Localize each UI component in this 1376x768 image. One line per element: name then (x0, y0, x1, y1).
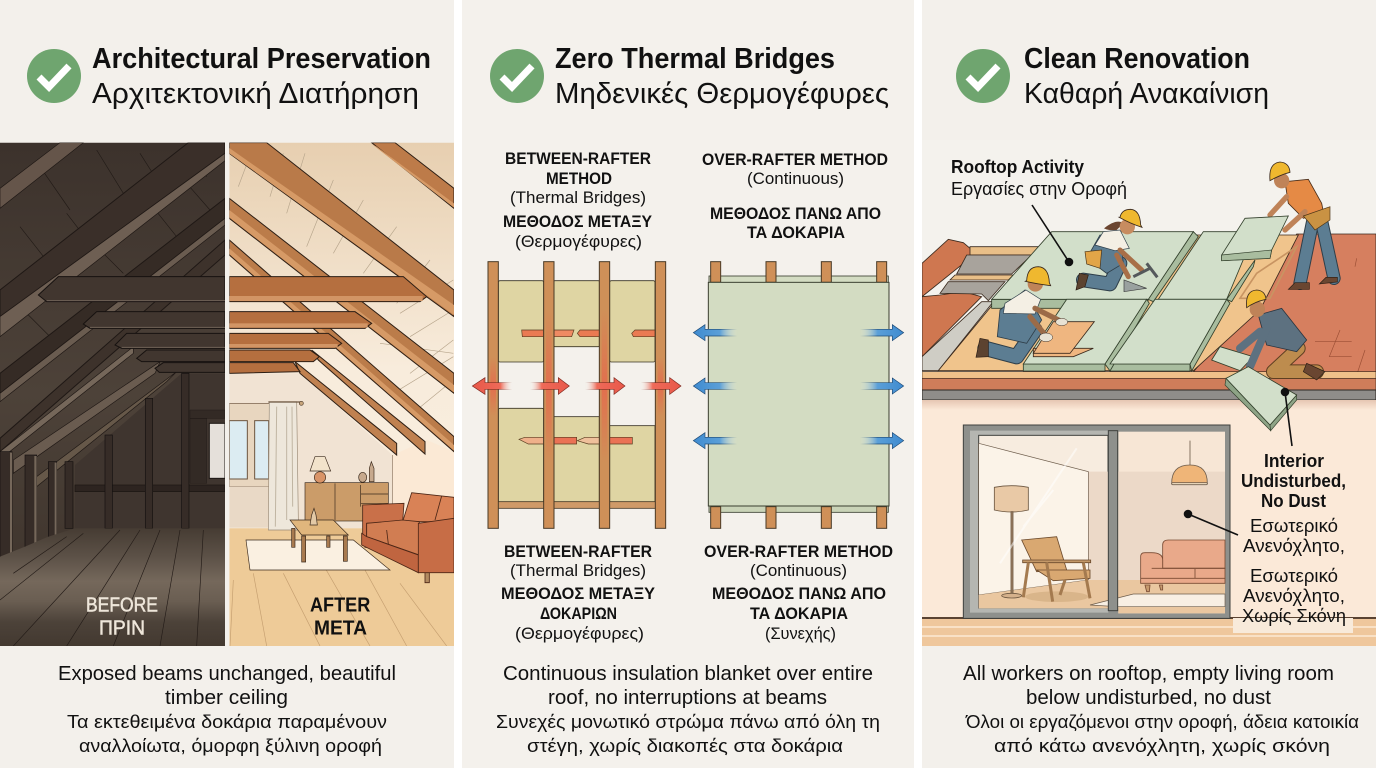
rug and coffee table (246, 508, 390, 570)
label: after: AFTER (310, 594, 371, 616)
sofa in living room (1141, 540, 1225, 592)
caption: clean renovation (963, 663, 1359, 756)
label: interior undisturbed: No Dust (1261, 491, 1326, 511)
top label: over-rafter method (702, 150, 888, 242)
label: rooftop activity (951, 157, 1127, 199)
label: interior undisturbed: Εσωτερικό (1250, 516, 1338, 536)
panel: zero thermal bridges (462, 0, 914, 768)
caption: thermal bridges (496, 663, 880, 756)
leader line: interior room (1184, 510, 1238, 535)
top label: over-rafter method: ΤΑ ΔΟΚΑΡΙΑ (747, 223, 845, 242)
top label: between-rafter method: (Θερμογέφυρες) (515, 232, 642, 251)
heading: zero thermal bridges: Zero Thermal Bridges (555, 43, 835, 75)
caption: preservation: timber ceiling (165, 687, 288, 709)
top label: between-rafter method: BETWEEN-RAFTER (505, 149, 651, 168)
bottom label: between-rafter method: (Θερμογέφυρες) (515, 624, 644, 643)
top label: between-rafter method: METHOD (546, 169, 612, 188)
heading: architectural preservation: Αρχιτεκτονική Διατήρηση (92, 78, 419, 110)
wood deck (938, 235, 1298, 371)
caption: preservation: αναλλοίωτα, όμορφη ξύλινη οροφή (79, 736, 382, 756)
illustration: rooftop with workers (922, 140, 1376, 410)
eaves (922, 372, 1376, 410)
heading: clean renovation: Clean Renovation (1024, 43, 1250, 75)
top label: between-rafter method: ΜΕΘΟΔΟΣ ΜΕΤΑΞΥ (503, 212, 653, 231)
heading: zero thermal bridges (555, 43, 889, 110)
label: interior undisturbed: Χωρίς Σκόνη (1242, 606, 1346, 626)
bottom label: over-rafter method: (Συνεχής) (765, 624, 836, 643)
top label: between-rafter method (503, 149, 653, 251)
worker: crouching right (1212, 290, 1325, 380)
caption: thermal bridges: στέγη, χωρίς διακοπές στα δοκάρια (527, 736, 843, 756)
diagram: between-rafter insulation (472, 262, 681, 528)
bottom label: between-rafter method: ΔΟΚΑΡΙΩΝ (540, 604, 617, 623)
label: interior undisturbed: Ανενόχλητο, (1243, 586, 1345, 606)
heading: clean renovation: Καθαρή Ανακαίνιση (1024, 78, 1269, 110)
roof shingles (922, 234, 1376, 380)
caption: preservation (58, 663, 396, 756)
worker: hammering centre (1076, 209, 1157, 292)
illustration: attic before (0, 143, 225, 646)
bottom label: between-rafter method: BETWEEN-RAFTER (504, 542, 652, 561)
heading: architectural preservation: Architectural Preservation (92, 43, 431, 75)
label: interior undisturbed: Εσωτερικό (1250, 566, 1338, 586)
bottom label: between-rafter method: ΜΕΘΟΔΟΣ ΜΕΤΑΞΥ (501, 584, 656, 603)
bottom label: over-rafter method: ΜΕΘΟΔΟΣ ΠΑΝΩ ΑΠΟ (712, 584, 886, 603)
illustration: sliding window with interior (963, 425, 1230, 618)
heading: architectural preservation (92, 43, 431, 110)
bottom label: over-rafter method: (Continuous) (750, 561, 847, 580)
heading: clean renovation (1024, 43, 1269, 110)
curtain (268, 401, 303, 530)
top label: over-rafter method: OVER-RAFTER METHOD (702, 150, 888, 169)
label: before (87, 597, 158, 635)
top label: over-rafter method: ΜΕΘΟΔΟΣ ΠΑΝΩ ΑΠΟ (710, 204, 881, 223)
diagram: over-rafter insulation (693, 262, 904, 528)
label: interior undisturbed: Interior (1264, 451, 1324, 471)
label: interior undisturbed: Undisturbed, (1241, 471, 1346, 491)
heat streaks through batts (519, 330, 655, 444)
heading: zero thermal bridges: Μηδενικές Θερμογέφυρες (555, 78, 889, 110)
top label: over-rafter method: (Continuous) (747, 169, 844, 188)
bottom label: over-rafter method: OVER-RAFTER METHOD (704, 542, 893, 561)
caption: thermal bridges: roof, no interruptions at beams (548, 687, 827, 709)
caption: clean renovation: Όλοι οι εργαζόμενοι στην οροφή, άδεια κατοικία (965, 712, 1359, 732)
floor deck (922, 618, 1376, 646)
heat tint on rafters (490, 310, 663, 463)
continuous blanket (708, 282, 889, 506)
caption: preservation: Τα εκτεθειμένα δοκάρια παραμένουν (67, 712, 387, 732)
bottom label: over-rafter method: ΤΑ ΔΟΚΑΡΙΑ (750, 604, 848, 623)
label: interior undisturbed (1233, 451, 1353, 633)
falling insulation panel (1225, 367, 1297, 431)
label: before: ΠΡΙΝ (99, 618, 145, 640)
caption: thermal bridges: Συνεχές μονωτικό στρώμα πάνω από όλη τη (496, 712, 880, 732)
caption: clean renovation: All workers on rooftop, empty living room (963, 663, 1334, 685)
bottom label: over-rafter method (704, 542, 893, 643)
worker: kneeling left (976, 267, 1094, 357)
rafters (488, 262, 666, 528)
armchair (1022, 537, 1091, 602)
wall below the roof (922, 410, 1376, 618)
label: after (310, 598, 370, 634)
sofa (362, 493, 454, 583)
window (229, 403, 269, 527)
icon: check badge (490, 49, 544, 103)
caption: thermal bridges: Continuous insulation blanket over entire (503, 663, 873, 685)
label: before: BEFORE (86, 594, 158, 616)
panel: architectural preservation (0, 0, 454, 768)
icon: check badge (956, 49, 1010, 103)
floor lamp (994, 486, 1028, 598)
leader line: rooftop (1032, 205, 1072, 266)
label: interior undisturbed: Ανενόχλητο, (1243, 536, 1345, 556)
top label: between-rafter method: (Thermal Bridges) (510, 188, 646, 207)
retained heat arrows (693, 325, 904, 449)
bottom label: between-rafter method: (Thermal Bridges) (510, 561, 646, 580)
caption: clean renovation: below undisturbed, no dust (1026, 687, 1271, 709)
heat loss arrows (472, 378, 681, 394)
label: after: META (314, 618, 367, 640)
icon: check badge (27, 49, 81, 103)
pendant lamp (1172, 441, 1207, 485)
insulation panels (992, 232, 1255, 371)
sideboard with lamp and vases (305, 457, 388, 521)
worker: standing carrying panel (1222, 162, 1337, 289)
label: rooftop activity: Rooftop Activity (951, 157, 1084, 177)
label: rooftop activity: Εργασίες στην Οροφή (951, 179, 1127, 199)
bottom label: between-rafter method (501, 542, 656, 643)
leader line: interior top (1282, 388, 1292, 446)
caption: clean renovation: από κάτω ανενόχλητη, χωρίς σκόνη (994, 736, 1330, 756)
panel: clean renovation (922, 0, 1376, 768)
insulation batts (498, 281, 655, 502)
illustration: attic after (229, 143, 454, 646)
caption: preservation: Exposed beams unchanged, beautiful (58, 663, 396, 685)
